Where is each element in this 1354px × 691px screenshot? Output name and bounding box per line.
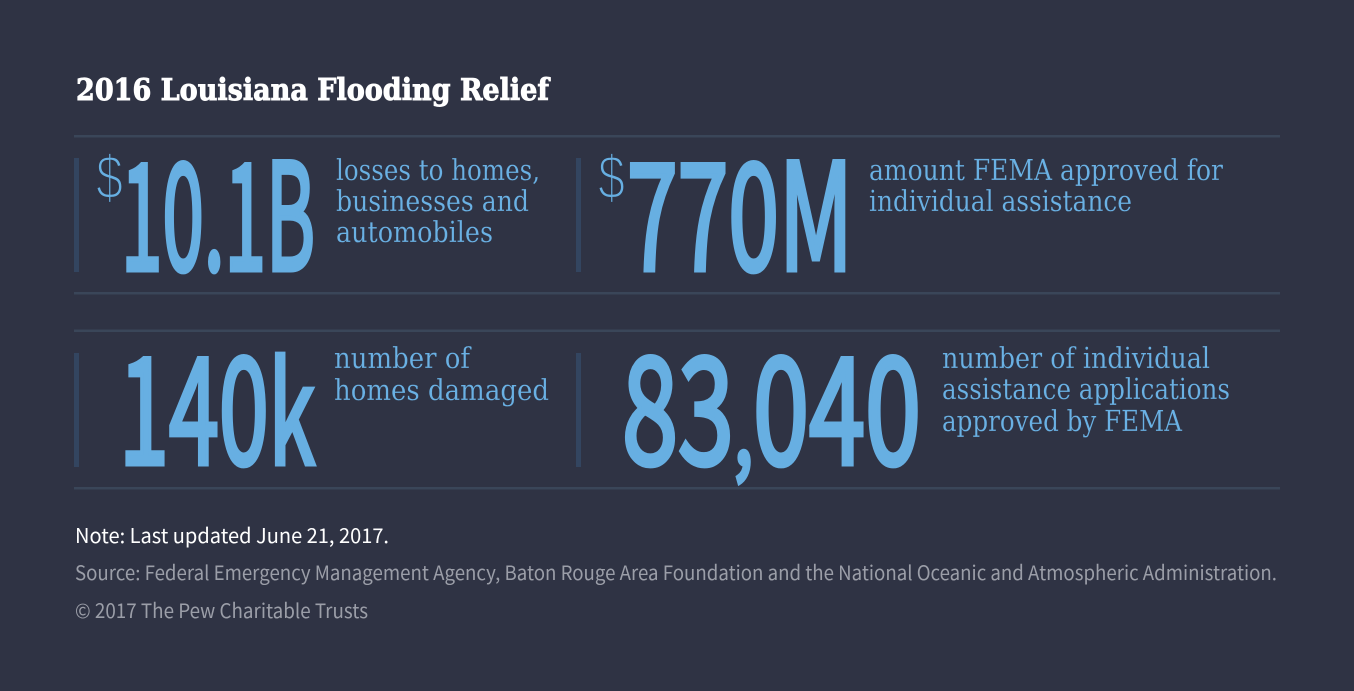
- description: FEMA amount: individual assistance: [869, 184, 1132, 218]
- title: 2016 Louisiana Flooding Relief: [76, 73, 551, 108]
- stat: 140k: 140k: [119, 292, 315, 507]
- stat: 10.1B: 10.1B: [121, 98, 315, 313]
- description: applications: [942, 341, 1230, 438]
- description: homes damaged: number of: [334, 341, 472, 375]
- source: Source: Federal Emergency Management Agency, Baton Rouge Area Foundation and the National Oceanic and Atmospheric Administration.: [75, 557, 1277, 586]
- description: applications: approved by FEMA: [942, 404, 1183, 438]
- description: losses: automobiles: [336, 215, 493, 249]
- panel: losses stat: $: [96, 144, 123, 213]
- panel: applications stat: [576, 292, 1230, 507]
- panel: FEMA amount stat: [576, 98, 1223, 313]
- description: applications: number of individual: [942, 341, 1210, 375]
- description: FEMA amount: [869, 153, 1223, 218]
- description: homes damaged: [334, 341, 549, 407]
- description: losses: [336, 153, 540, 249]
- description: FEMA amount: amount FEMA approved for: [869, 153, 1223, 187]
- copyright: © 2017 The Pew Charitable Trusts: [75, 595, 368, 624]
- panel: homes damaged stat: [74, 292, 549, 507]
- description: losses: losses to homes,: [336, 153, 540, 187]
- description: losses: businesses and: [336, 184, 529, 218]
- description: applications: assistance applications: [942, 372, 1230, 406]
- stat: 83,040: 83,040: [622, 292, 921, 507]
- panel: FEMA amount stat: $: [598, 144, 625, 213]
- note: Note: Last updated June 21, 2017.: [75, 519, 389, 549]
- stat: 770M: 770M: [627, 98, 853, 313]
- description: homes damaged: homes damaged: [334, 373, 549, 407]
- panel: losses stat: [74, 98, 540, 313]
